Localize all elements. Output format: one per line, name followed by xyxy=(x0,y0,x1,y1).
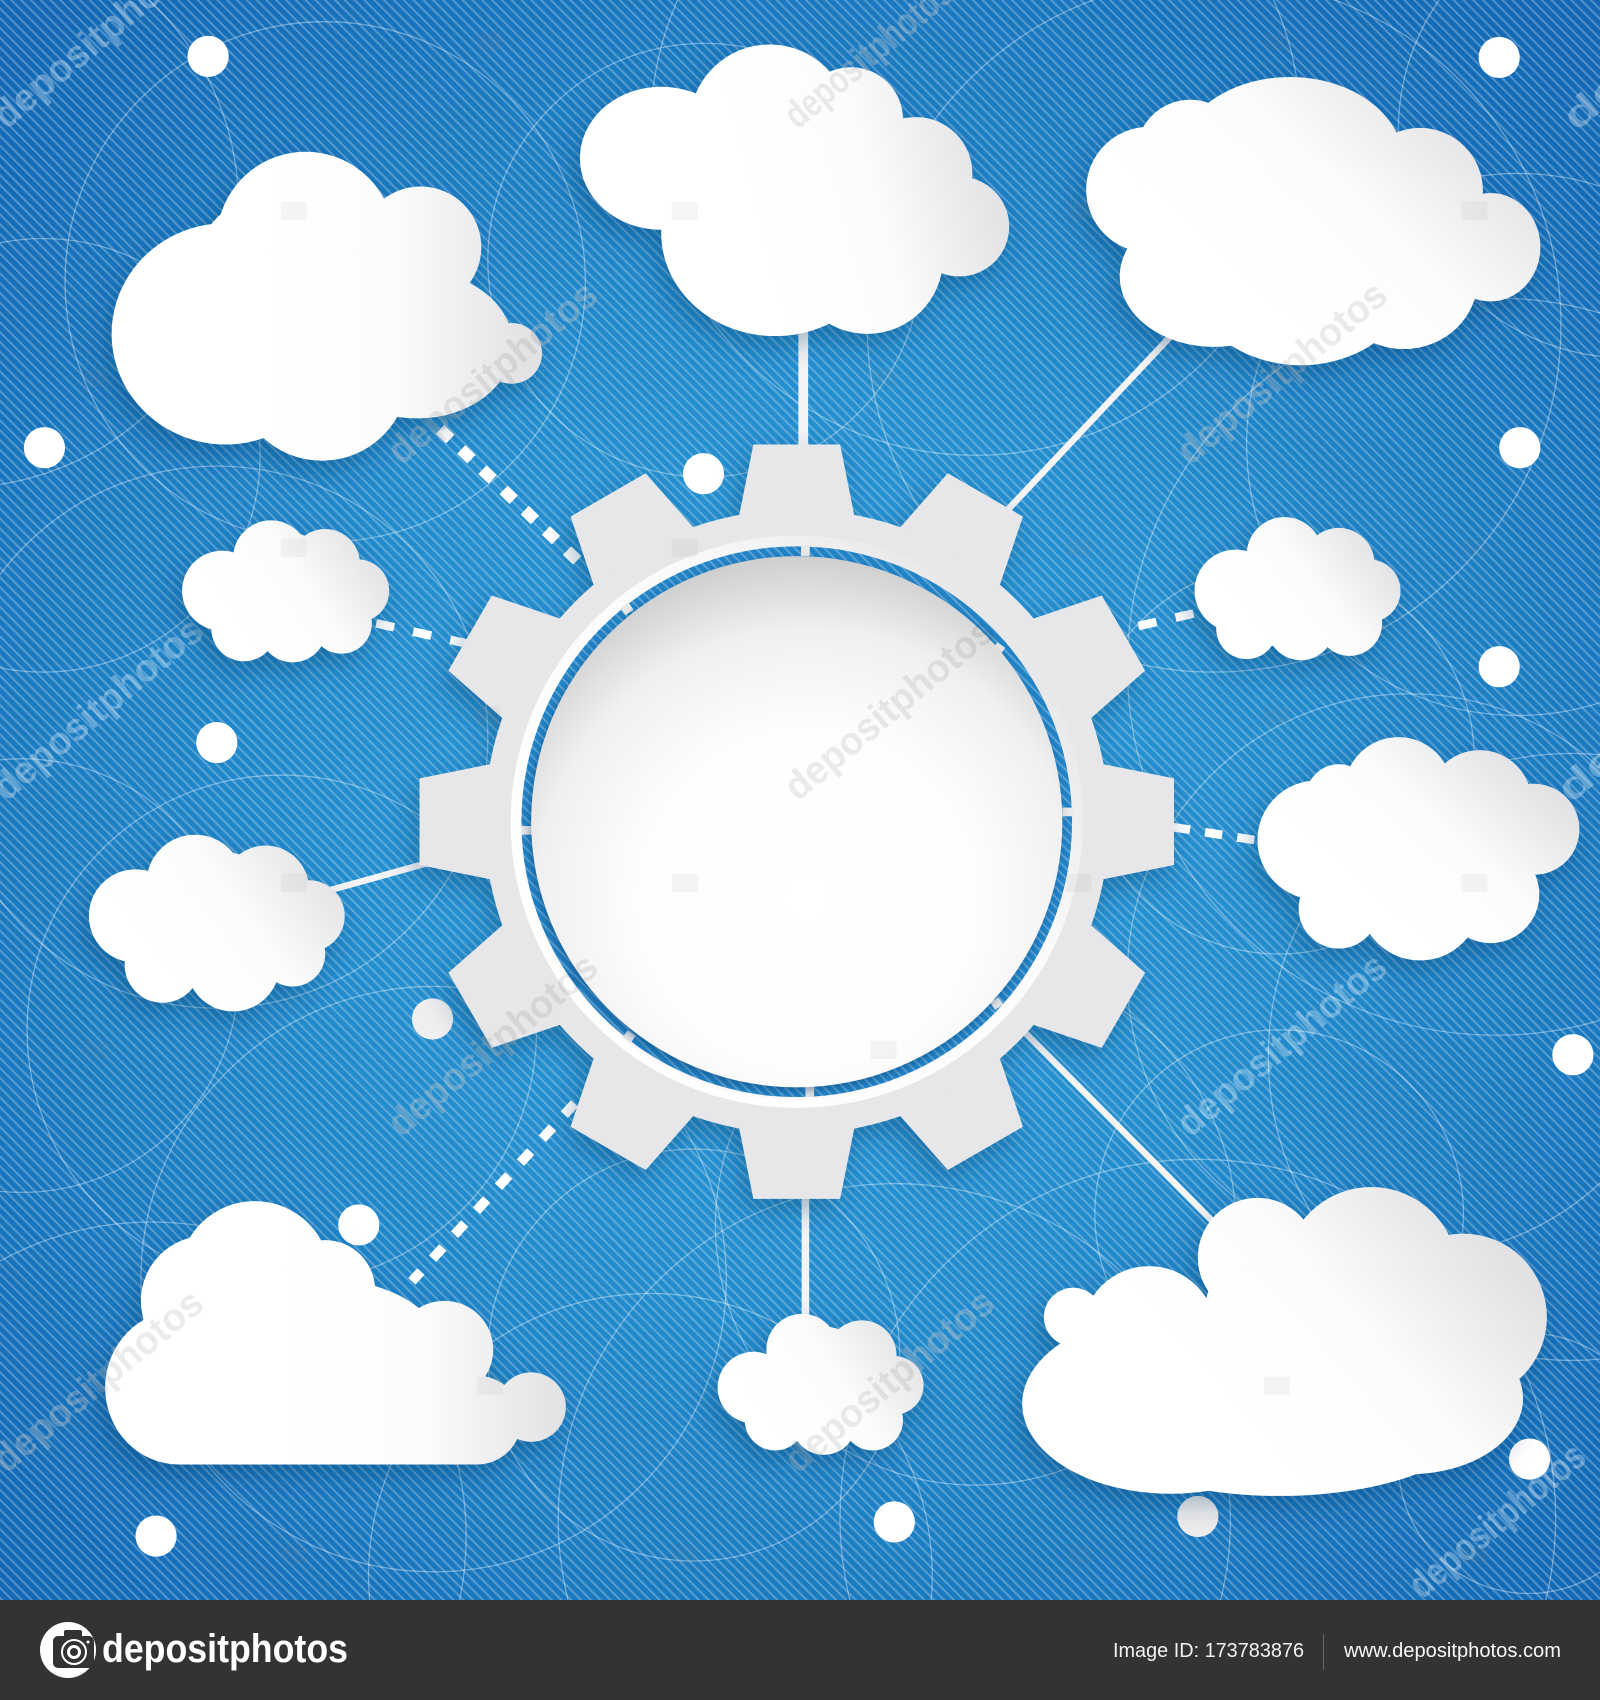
image id: Image ID: 173783876 xyxy=(1113,1640,1304,1662)
watermark: light text on blue: depositphotos xyxy=(379,945,606,1145)
connector: dashed line to small left cloud xyxy=(376,623,468,644)
connector: solid line to bottom cloud xyxy=(802,1192,809,1322)
gear: blue gap showing background xyxy=(521,546,1072,1097)
gear: central empty circle xyxy=(531,556,1062,1087)
cloud: middle left xyxy=(89,835,345,1011)
logo wordmark: depositphotos xyxy=(102,1627,348,1671)
cloud: small bottom xyxy=(718,1314,924,1455)
connector: dashed line to small right cloud xyxy=(1136,614,1193,627)
icon: camera logo xyxy=(40,1622,96,1678)
cloud: top left xyxy=(112,152,542,461)
connector: solid line to top cloud xyxy=(799,325,808,450)
watermark: grey text over white shapes: depositphotos xyxy=(379,945,606,1145)
watermark: grey text over white shapes xyxy=(0,0,1395,1481)
watermark: light text on blue: depositphotos xyxy=(1168,273,1395,473)
cloud: top right xyxy=(1086,77,1540,365)
cloud: small left xyxy=(182,520,389,662)
connector: dashed line to top left cloud xyxy=(440,429,588,570)
connector: solid line to bottom right cloud xyxy=(1024,1032,1216,1225)
footer graphics: logo and wordmark xyxy=(40,1622,1561,1678)
cloud: bottom left xyxy=(105,1201,566,1464)
watermark: small camera marks xyxy=(82,33,1487,1564)
watermark: grey text over white shapes: depositphotos xyxy=(776,609,1003,809)
watermark: light text on blue: depositphotos xyxy=(379,273,606,473)
cloud: middle right xyxy=(1257,737,1579,960)
connector: dashed line to right cloud xyxy=(1173,827,1262,841)
watermark: grey text over white shapes: depositphotos xyxy=(776,1281,1003,1481)
watermark: grey text over white shapes: depositphotos xyxy=(379,273,606,473)
gear: twelve tooth body xyxy=(420,444,1174,1199)
footer: dark stock photo bar xyxy=(0,1600,1600,1700)
connector: solid line to top right cloud xyxy=(1006,334,1173,512)
website url: www.depositphotos.com xyxy=(1343,1640,1561,1662)
gear: white inner ring xyxy=(511,536,1083,1108)
watermark: light text on blue: depositphotos xyxy=(1168,945,1395,1145)
connector: dashed line to bottom left cloud xyxy=(412,1104,575,1281)
watermark: light text on blue: depositphotos xyxy=(776,1281,1003,1481)
connector: solid line to left cloud xyxy=(331,863,428,890)
cloud: small right xyxy=(1195,517,1401,660)
gear: small white spoke ticks in the gap xyxy=(521,545,1073,1097)
separator xyxy=(1323,1634,1324,1670)
watermark: grey text over white shapes: depositphotos xyxy=(1168,273,1395,473)
cloud: bottom right xyxy=(1022,1187,1547,1496)
cloud: top centre xyxy=(580,44,1009,336)
